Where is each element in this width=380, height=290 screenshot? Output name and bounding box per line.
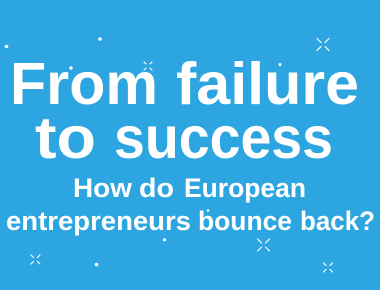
subtitle: European — [184, 173, 306, 203]
title: failure — [176, 51, 359, 117]
title — [10, 51, 359, 171]
title: From — [10, 51, 158, 117]
subtitle: How — [73, 173, 133, 203]
subtitle: back? — [300, 206, 375, 236]
subtitle: bounce — [198, 206, 292, 236]
title: to — [35, 105, 96, 171]
title: success — [114, 105, 333, 171]
sparkle icons — [31, 38, 332, 272]
decorative dots — [5, 37, 281, 266]
subtitle — [6, 173, 375, 236]
subtitle: entrepreneurs — [6, 206, 191, 236]
subtitle: do — [139, 173, 174, 203]
